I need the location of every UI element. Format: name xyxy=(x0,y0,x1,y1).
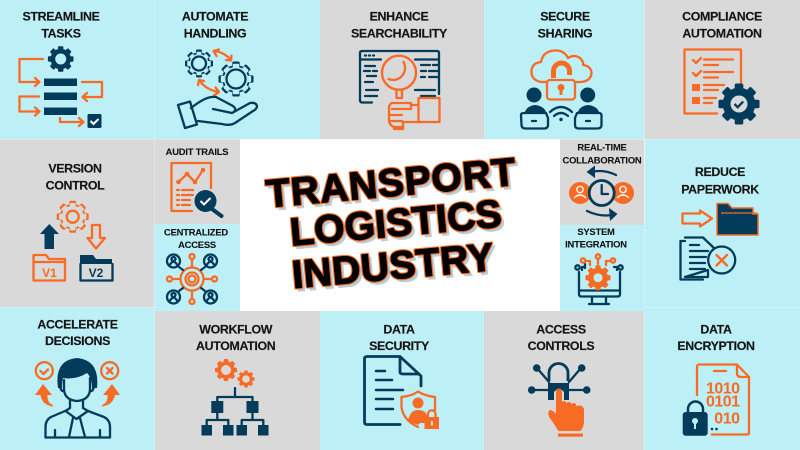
icon: binary document with lock: 0101 xyxy=(706,394,740,411)
panel: reduce paperwork xyxy=(645,140,800,307)
panel: data encryption xyxy=(644,308,800,450)
icon: decision maker xyxy=(35,358,120,438)
heading: compliance automation: COMPLIANCE xyxy=(682,10,762,24)
heading: access controls: ACCESS xyxy=(536,322,586,336)
title: shadow and lettering: TRANSPORT xyxy=(267,154,520,219)
heading: automate handling: HANDLING xyxy=(184,26,246,40)
heading: workflow automation: AUTOMATION xyxy=(196,339,276,353)
icon: versioned folders: V1 xyxy=(42,266,57,280)
panel: accelerate decisions xyxy=(0,308,154,450)
heading: data encryption: DATA xyxy=(700,322,732,336)
panel: streamline tasks xyxy=(0,0,154,139)
icon: versioned folders xyxy=(34,201,112,280)
heading: streamline tasks: STREAMLINE xyxy=(22,10,100,24)
panel: data security xyxy=(320,311,484,450)
heading: workflow automation: WORKFLOW xyxy=(199,322,273,336)
title: shadow and lettering: LOGISTICS xyxy=(288,193,503,255)
panel: access controls xyxy=(484,311,644,450)
panel: system integration xyxy=(560,225,644,311)
panel: centralized access xyxy=(155,224,240,311)
heading: data security: SECURITY xyxy=(369,339,430,353)
icon: versioned folders: V2 xyxy=(89,266,104,280)
title: shadow and lettering: INDUSTRY xyxy=(290,236,495,297)
heading: enhance searchability: SEARCHABILITY xyxy=(351,26,448,40)
heading: system integration: SYSTEM xyxy=(577,226,615,237)
icon: checklist and gear xyxy=(684,50,760,124)
heading: centralized access: ACCESS xyxy=(178,239,216,250)
icon: gears and org tree xyxy=(202,359,268,436)
heading: version control: VERSION xyxy=(48,162,102,176)
panel: workflow automation xyxy=(155,311,320,450)
title: shadow and lettering xyxy=(264,151,520,300)
heading: accelerate decisions: DECISIONS xyxy=(45,334,110,348)
heading: reduce paperwork: PAPERWORK xyxy=(681,182,759,196)
heading: data encryption: ENCRYPTION xyxy=(677,339,755,353)
heading: secure sharing: SECURE xyxy=(540,10,590,24)
icon: task flow xyxy=(20,46,102,128)
title: shadow and lettering: LOGISTICS xyxy=(288,193,503,255)
heading: reduce paperwork: REDUCE xyxy=(695,165,745,179)
heading: audit trails: AUDIT TRAILS xyxy=(166,146,228,157)
panel: audit trails xyxy=(155,140,240,224)
panel: automate handling xyxy=(155,0,320,139)
heading: secure sharing: SHARING xyxy=(538,26,592,40)
icon: cloud lock with users xyxy=(521,50,602,128)
icon: document with shield xyxy=(364,356,439,429)
title: shadow and lettering: TRANSPORT xyxy=(264,151,517,216)
heading: accelerate decisions: ACCELERATE xyxy=(37,317,118,331)
heading: version control: CONTROL xyxy=(46,179,105,193)
panel: real-time collaboration xyxy=(560,140,644,225)
panel: title xyxy=(240,140,560,311)
panel: enhance searchability xyxy=(320,0,484,139)
heading: compliance automation: AUTOMATION xyxy=(682,26,762,40)
title: shadow and lettering: INDUSTRY xyxy=(290,236,495,297)
icon: clock with users xyxy=(569,166,634,221)
heading: system integration: INTEGRATION xyxy=(565,238,627,249)
heading: data security: DATA xyxy=(383,322,415,336)
panel: version control xyxy=(0,140,154,307)
title: shadow and lettering: LOGISTICS xyxy=(291,196,506,258)
heading: access controls: CONTROLS xyxy=(528,339,594,353)
icon: binary document with lock: 010 xyxy=(714,410,740,427)
heading: real-time collaboration: REAL-TIME xyxy=(577,142,627,153)
heading: centralized access: CENTRALIZED xyxy=(164,226,228,237)
icon: magnifier over document xyxy=(360,51,440,129)
icon: report with magnifier xyxy=(172,163,222,216)
icon: hand with gears xyxy=(178,50,257,128)
icon: touch lock xyxy=(528,364,590,437)
title: shadow and lettering: TRANSPORT xyxy=(264,151,517,216)
icon: central hub with users xyxy=(167,254,217,304)
icon: monitor with gear xyxy=(575,254,623,304)
icon: binary document with lock xyxy=(683,364,749,436)
panel: compliance automation xyxy=(644,0,800,139)
heading: streamline tasks: TASKS xyxy=(41,26,81,40)
icon: binary document with lock: 1010 xyxy=(706,380,740,397)
icon: folder and documents xyxy=(680,204,758,280)
heading: automate handling: AUTOMATE xyxy=(182,10,248,24)
panel: secure sharing xyxy=(484,0,644,139)
title: shadow and lettering: INDUSTRY xyxy=(293,239,498,300)
heading: enhance searchability: ENHANCE xyxy=(370,10,428,24)
heading: real-time collaboration: COLLABORATION xyxy=(562,154,642,165)
